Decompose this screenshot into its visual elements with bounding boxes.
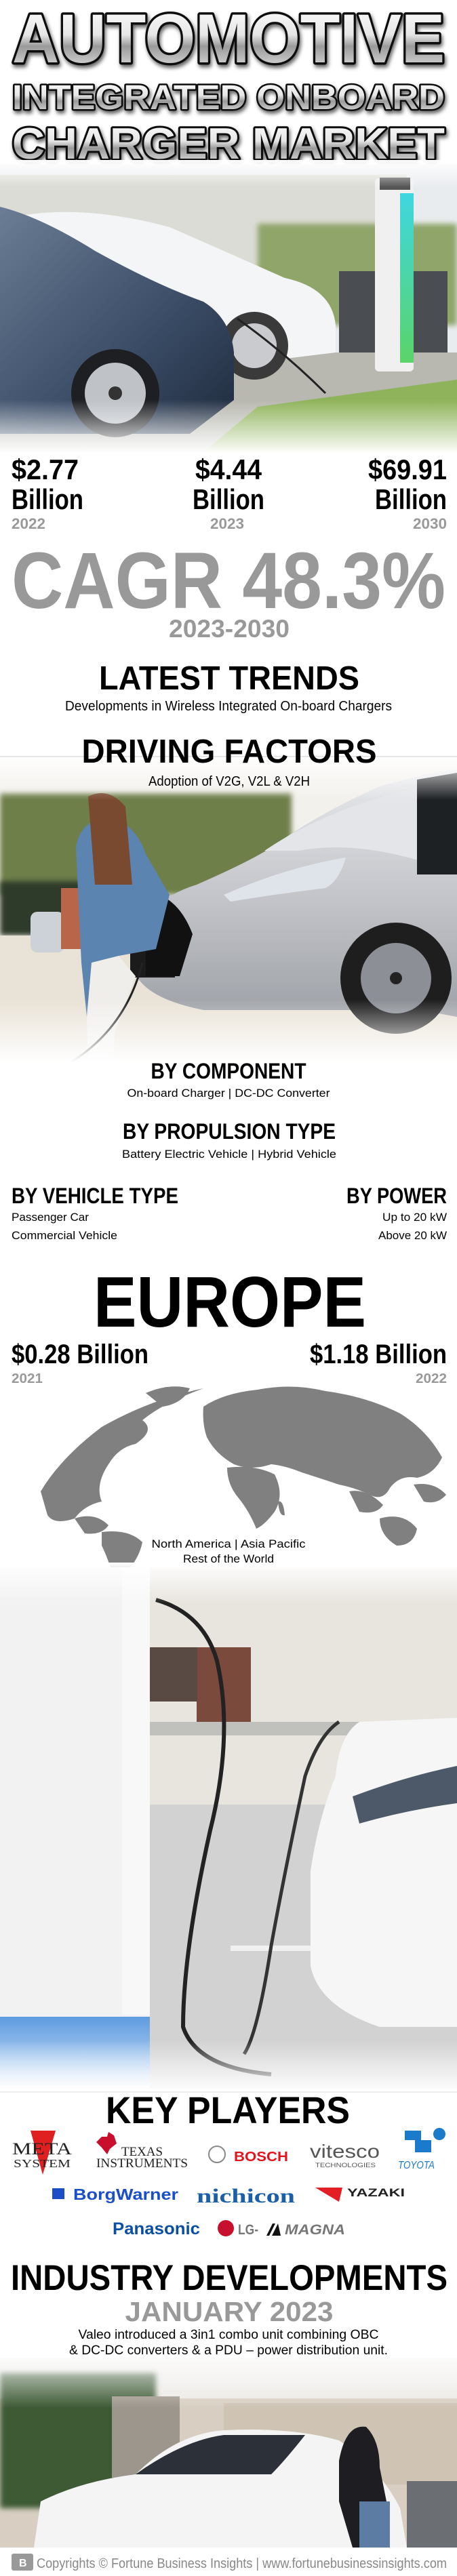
driving factors heading bbox=[81, 733, 377, 789]
driving factors heading: DRIVING FACTORS bbox=[81, 733, 377, 770]
segment: by power: Up to 20 kW bbox=[382, 1211, 447, 1224]
stat: 2022 bbox=[12, 454, 83, 532]
stat: 2023 bbox=[193, 454, 264, 532]
footer bbox=[0, 2548, 457, 2576]
driving factors heading: Adoption of V2G, V2L & V2H bbox=[148, 774, 310, 789]
blue car bbox=[0, 207, 234, 434]
segment: by component bbox=[127, 1059, 330, 1100]
woman bbox=[339, 2427, 386, 2548]
logo: Vitesco bbox=[310, 2141, 380, 2169]
stat: 2022: $2.77 bbox=[12, 454, 79, 485]
latest trends: LATEST TRENDS bbox=[99, 660, 359, 697]
logo: LG-Magna: LG- bbox=[238, 2222, 258, 2238]
industry developments: JANUARY 2023 bbox=[125, 2296, 333, 2327]
key players heading: KEY PLAYERS bbox=[106, 2089, 350, 2131]
logo: Yazaki bbox=[315, 2186, 405, 2202]
segment: by power: Above 20 kW bbox=[378, 1229, 447, 1242]
logo: LG-Magna bbox=[218, 2220, 345, 2238]
stat: 2022: Billion bbox=[12, 483, 83, 515]
logo: Bosch bbox=[209, 2146, 288, 2165]
logo: Texas Instruments: INSTRUMENTS bbox=[96, 2156, 188, 2171]
logo: Yazaki: YAZAKI bbox=[347, 2186, 405, 2199]
segment: by component: BY COMPONENT bbox=[151, 1059, 306, 1083]
latest trends: Developments in Wireless Integrated On-board Chargers bbox=[65, 699, 392, 714]
stat: 2023: Billion bbox=[193, 483, 264, 515]
logo: Meta System bbox=[12, 2131, 72, 2175]
stat: 2030: 2030 bbox=[413, 515, 447, 532]
CAGR: 2023-2030 bbox=[169, 615, 290, 643]
segment: by vehicle type bbox=[12, 1184, 178, 1242]
region: Europe: $0.28 Billion bbox=[12, 1340, 148, 1369]
pillar bbox=[0, 1567, 150, 2017]
logo: Toyota: TOYOTA bbox=[398, 2160, 435, 2171]
stat: 2023: $4.44 bbox=[195, 454, 262, 485]
segment: by vehicle type: Commercial Vehicle bbox=[12, 1229, 117, 1242]
logo: Meta System: META bbox=[12, 2140, 72, 2158]
segment: by vehicle type: BY VEHICLE TYPE bbox=[12, 1184, 178, 1208]
region: Europe: 2022 bbox=[416, 1371, 447, 1386]
segment: by propulsion type: Battery Electric Vehicle | Hybrid Vehicle bbox=[122, 1148, 336, 1161]
title bbox=[12, 0, 445, 168]
logo: BorgWarner: BorgWarner bbox=[73, 2186, 178, 2203]
stat: 2022: 2022 bbox=[12, 515, 45, 532]
region: Europe bbox=[12, 1262, 447, 1386]
photo: woman with car in city bbox=[0, 2347, 457, 2548]
industry developments: & DC-DC converters & a PDU – power distribution unit. bbox=[69, 2343, 388, 2358]
logo: Panasonic: Panasonic bbox=[113, 2219, 200, 2238]
logo: Vitesco: TECHNOLOGIES bbox=[315, 2162, 376, 2169]
logo: Toyota bbox=[398, 2128, 445, 2171]
segment: by vehicle type: Passenger Car bbox=[12, 1211, 89, 1224]
charger pillar bbox=[375, 178, 414, 371]
logo: Nichicon: nichicon bbox=[197, 2185, 295, 2207]
logo: Texas Instruments bbox=[96, 2132, 188, 2171]
photo: electric cars charging bbox=[0, 160, 457, 454]
silver car bbox=[132, 769, 457, 1017]
regions list: Rest of the World bbox=[183, 1552, 274, 1565]
white car bbox=[311, 1718, 457, 2027]
segment: by power bbox=[346, 1184, 447, 1242]
logos bbox=[12, 2128, 445, 2238]
logo: LG-Magna: MAGNA bbox=[285, 2222, 345, 2238]
woman bbox=[76, 817, 170, 1017]
segment: by propulsion type: BY PROPULSION TYPE bbox=[123, 1119, 336, 1144]
segment: by propulsion type bbox=[122, 1119, 336, 1161]
regions list bbox=[152, 1537, 306, 1565]
segment: by component: On-board Charger | DC-DC Converter bbox=[127, 1087, 330, 1100]
title: INTEGRATED ONBOARD bbox=[12, 78, 445, 117]
stat: 2030 bbox=[368, 454, 447, 532]
cables bbox=[156, 1600, 271, 2074]
logo: Vitesco: vitesco bbox=[310, 2141, 380, 2162]
region: Europe: 2021 bbox=[12, 1371, 43, 1386]
world map bbox=[41, 1386, 446, 1583]
regions list: North America | Asia Pacific bbox=[152, 1537, 306, 1550]
industry developments bbox=[11, 2258, 448, 2358]
logo: Meta System: SYSTEM bbox=[14, 2157, 71, 2170]
region: Europe: EUROPE bbox=[94, 1262, 366, 1342]
white car bbox=[14, 212, 336, 366]
white car bbox=[34, 2430, 407, 2548]
latest trends bbox=[65, 660, 392, 714]
logo: Bosch: BOSCH bbox=[234, 2150, 288, 2165]
photo: woman charging car bbox=[0, 770, 457, 1060]
stat: 2023: 2023 bbox=[210, 515, 244, 532]
photo: charging cable bbox=[0, 1563, 457, 2092]
industry developments: Valeo introduced a 3in1 combo unit combining OBC bbox=[79, 2328, 378, 2342]
logo: Texas Instruments: TEXAS bbox=[121, 2145, 163, 2159]
title: CHARGER MARKET bbox=[12, 119, 445, 168]
footer: B bbox=[19, 2558, 27, 2569]
stat: 2030: $69.91 bbox=[368, 454, 447, 485]
